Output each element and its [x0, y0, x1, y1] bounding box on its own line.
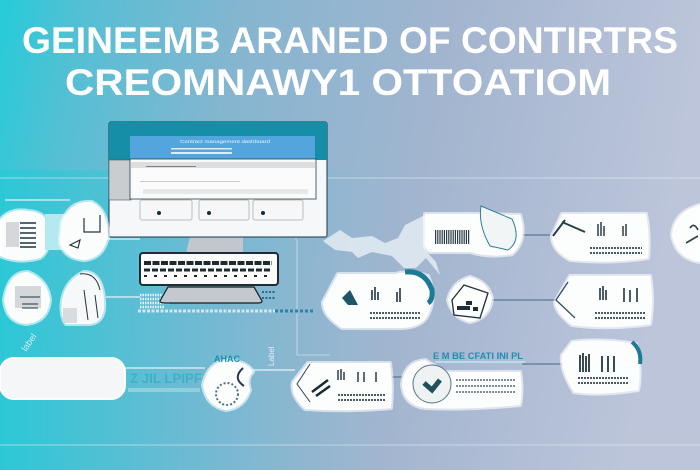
left column: document card: [4, 272, 50, 324]
card B: chart: [552, 214, 649, 262]
card C: partial circle: [672, 205, 700, 262]
left column: person card: [60, 202, 108, 260]
blob G: ring icon: [203, 360, 253, 410]
teal glitch label left: Label: [267, 346, 276, 366]
card E: folder icon: [448, 277, 492, 322]
monitor stand: [186, 237, 243, 253]
teal label above ring icon: AHAC: [214, 354, 240, 364]
teal glitch label left: label: [19, 332, 39, 353]
blue window header: Contract management dashboard: [180, 139, 271, 144]
central splash: [323, 215, 440, 275]
card A: barcode: [425, 206, 523, 256]
title line 2: CREOMNAWY1 OTTOATIOM: [65, 62, 611, 103]
monitor teal header: [109, 122, 327, 160]
card H: chart: [292, 363, 392, 410]
monitor base: [160, 287, 262, 303]
left column: wide pill card: [0, 358, 125, 399]
title: [22, 20, 678, 103]
card I: circle with table: [402, 360, 522, 409]
grey side window: [109, 160, 131, 200]
title line 1: GEINEEMB ARANED OF CONTIRTRS: [22, 20, 678, 61]
connector lines: [5, 200, 295, 370]
keyboard: [140, 253, 278, 285]
card D: bulb chart: [323, 272, 433, 328]
left column: figure card: [62, 272, 104, 324]
teal glitch label right: E M BE CFATI INI PL: [433, 351, 524, 361]
teal glitch label left: Z JIL LPIPF: [130, 370, 202, 386]
teal glitch label left: [19, 332, 276, 392]
monitor frame: [109, 122, 327, 237]
computer monitor illustration: [109, 122, 327, 311]
blue window header: [130, 136, 315, 159]
card F: chart: [555, 276, 652, 327]
main window panel: [130, 159, 316, 199]
dotted circuit texture: [138, 292, 315, 311]
card J: chart: [562, 340, 640, 394]
three dashboard cards: [140, 200, 303, 220]
left column: table card: [0, 210, 70, 261]
